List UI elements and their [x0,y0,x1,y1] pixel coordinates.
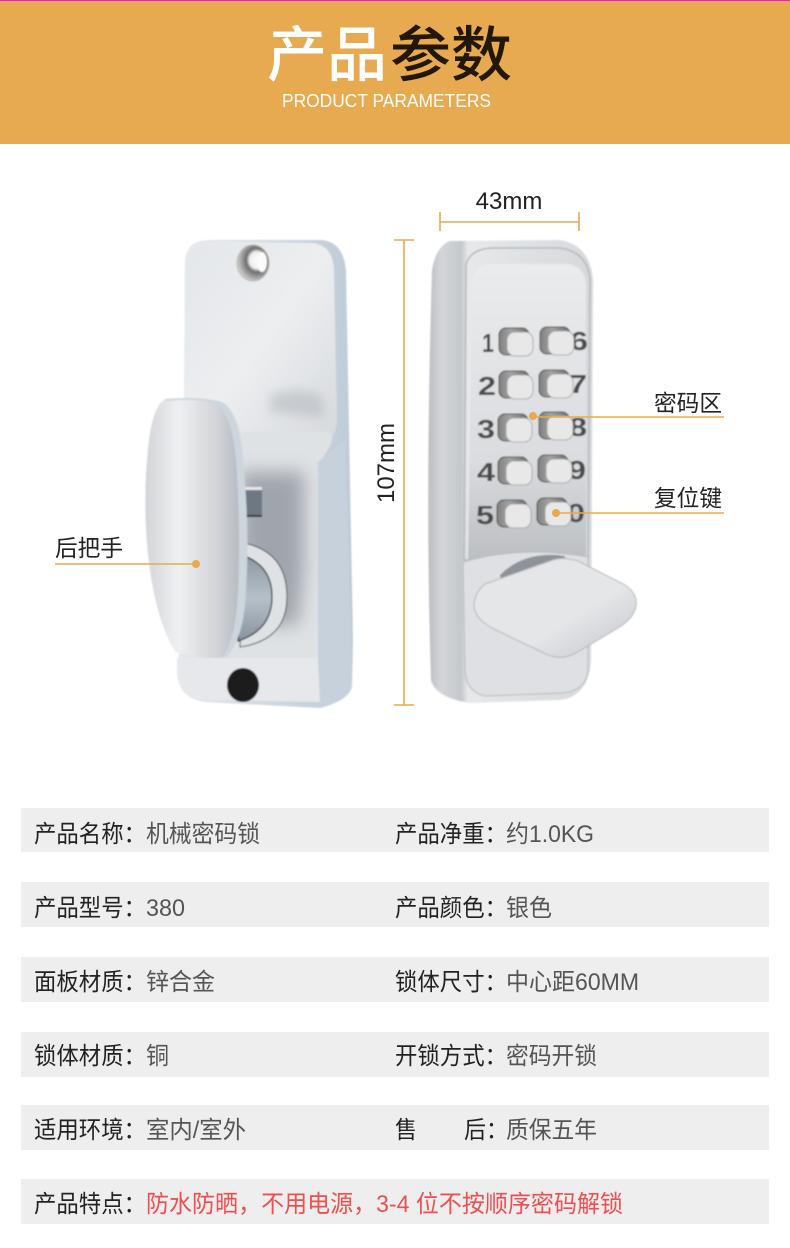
digits: 9 [568,455,586,485]
spec row 6: features [21,1179,769,1224]
title [267,22,512,89]
dimension: height 107mm: 107mm [373,423,400,503]
callout: code area: 密码区 [654,390,722,416]
rear plate [177,240,353,708]
digits [476,326,588,530]
cylinder [238,543,287,647]
spec row 5: 售 [395,1117,417,1144]
callout: reset key [552,485,724,517]
spec row 2 [21,882,769,927]
spec row 2: 380 [146,895,185,922]
outer housing [428,240,593,703]
spec row 6: features: 防水防晒，不用电源，3-4 位不按顺序密码解锁 [146,1191,623,1218]
rear handle [145,398,247,658]
dimension: height 107mm [373,240,414,705]
latch [244,487,262,517]
spec row 2: 产品型号： [34,895,146,922]
spec row 5: 后： [464,1117,508,1144]
spec row 5: 质保五年 [506,1117,597,1144]
spec row 3 [21,957,769,1002]
top accent line [0,0,790,1]
keypad buttons [497,327,574,528]
spec row 4 [21,1032,769,1077]
spec row 5: 适用环境： [34,1117,146,1144]
spec row 4: 密码开锁 [506,1043,597,1070]
spec row 5 [21,1105,769,1150]
spec row 1: 产品名称： [34,821,146,848]
black hole [227,668,259,702]
lower plate [463,552,588,696]
digits: 4 [477,457,496,487]
spec row 1: 约1.0KG [506,821,594,848]
spec row 4: 开锁方式： [395,1043,507,1070]
screw hole [237,245,269,281]
dimension: width 43mm: 43mm [476,188,542,215]
callout: rear handle: 后把手 [55,535,123,561]
digits: 7 [569,369,587,399]
spec row 6: features: 产品特点： [34,1191,146,1218]
dimension: width 43mm [440,188,579,231]
digits: 0 [567,498,585,528]
spec row 2: 产品颜色： [395,895,507,922]
spec row 2: 银色 [506,895,552,922]
keypad face [468,264,586,566]
rear lock photo [145,240,353,708]
subtitle: PRODUCT PARAMETERS [282,91,491,111]
header band [0,1,790,144]
spec row 4: 锁体材质： [34,1043,146,1070]
spec row 5: 室内/室外 [146,1117,246,1144]
digits: 5 [476,500,494,530]
spec row 3: 面板材质： [34,969,146,996]
callout: reset key: 复位键 [654,485,722,511]
digits: 8 [569,412,587,442]
title: 参数 [390,22,512,89]
spec row 1 [21,808,769,852]
spec row 3: 锁体尺寸： [395,969,507,996]
front lock photo [428,240,636,703]
digits: 1 [482,328,494,358]
title: 产品 [267,22,387,89]
thumb turn handle [474,555,636,657]
callout: code area [529,390,724,420]
spec row 4: 铜 [146,1043,169,1070]
digits: 6 [570,326,588,356]
spec row 1: 产品净重： [395,821,507,848]
digits: 2 [478,371,496,401]
spec row 3: 锌合金 [146,969,215,996]
spec row 3: 中心距60MM [506,969,639,996]
spec row 1: 机械密码锁 [146,821,260,848]
callout: rear handle [55,535,200,568]
digits: 3 [477,414,495,444]
